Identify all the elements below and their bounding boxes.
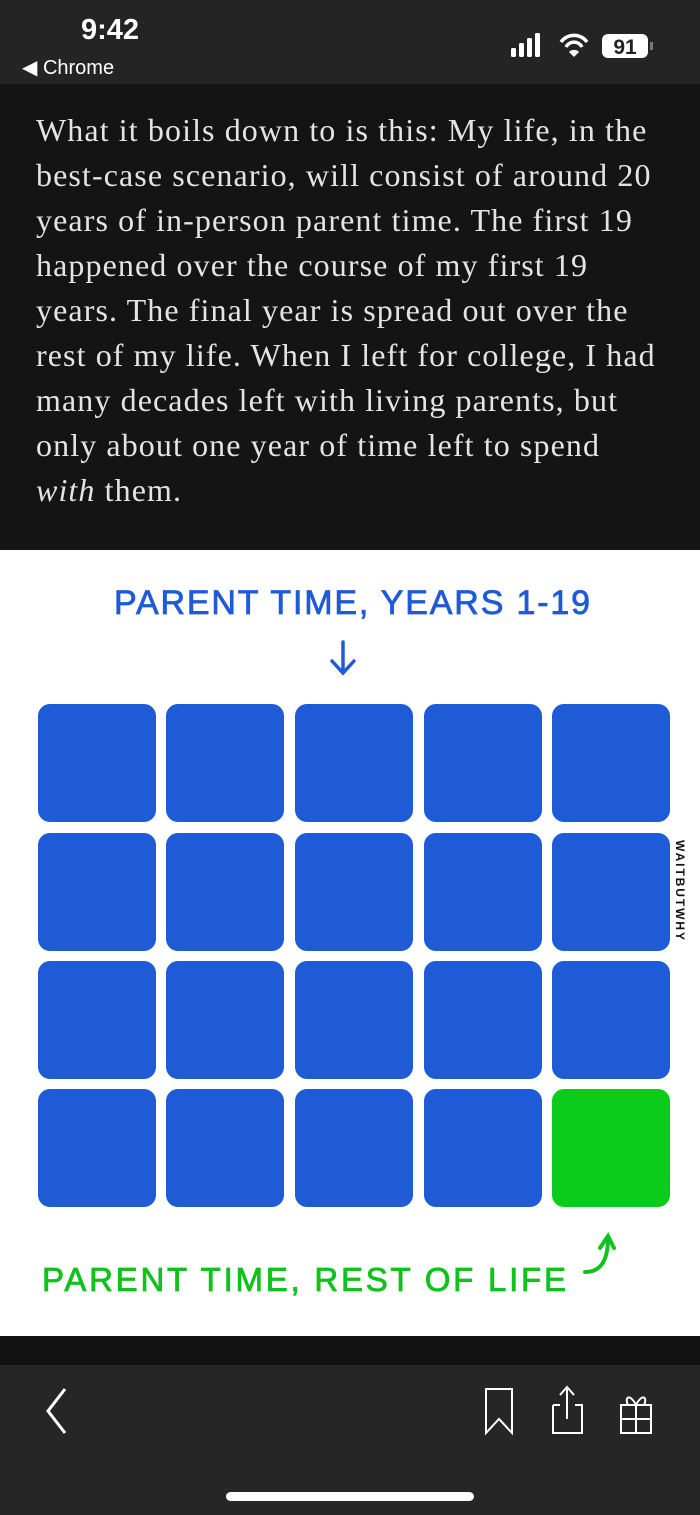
bottom label: PARENT TIME, REST OF LIFE [42,1261,566,1298]
arrow down [332,642,354,673]
article text: with them. [36,472,182,508]
status bar [0,0,700,84]
article text: What it boils down to is this: My life, in the [36,112,647,148]
article text: best-case scenario, will consist of around 20 [36,157,652,193]
title: PARENT TIME, YEARS 1-19 [114,584,590,622]
article text: only about one year of time left to spend [36,427,600,463]
status icons [511,33,653,59]
time: 9:42 [81,14,139,46]
back to Chrome: ◀ Chrome [22,57,114,79]
article text [36,112,656,508]
article text: years. The final year is spread out over the [36,292,628,328]
grid of squares [38,704,670,1207]
toolbar [0,1365,700,1515]
status icons: 91 [613,36,637,59]
article text: many decades left with living parents, but [36,382,618,418]
article text: years of in-person parent time. The first 19 [36,202,633,238]
article text: happened over the course of my first 19 [36,247,588,283]
toolbar icons [46,1386,652,1501]
article text: rest of my life. When I left for college, I had [36,337,656,373]
watermark: WAITBUTWHY [673,840,687,940]
footer strip [0,1336,700,1365]
panel: infographic [0,550,700,1336]
curved arrow up [585,1236,614,1272]
